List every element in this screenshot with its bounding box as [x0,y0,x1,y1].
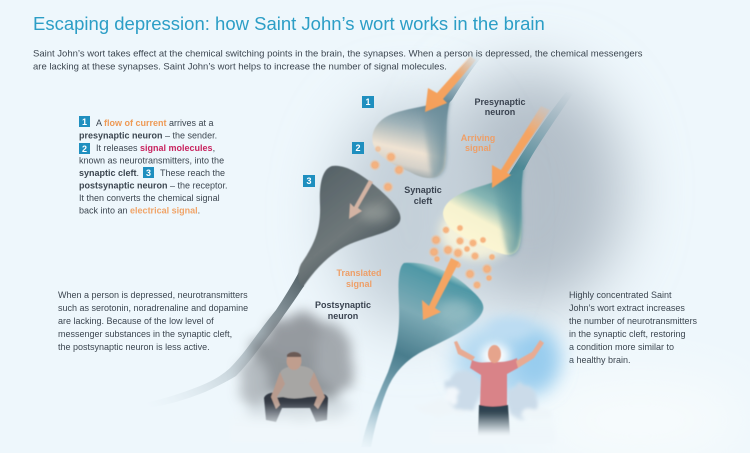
neuron: presynaptic active [440,92,574,260]
badge 1: 1 [365,97,371,107]
steps text block: 2 [82,144,87,154]
label: presynaptic neuron: neuron [485,107,515,117]
person: depressed [264,352,328,422]
depressed text: When a person is depressed, neurotransmitters [58,290,248,300]
label: synaptic cleft: Synaptic [404,185,442,195]
label: postsynaptic neuron: Postsynaptic [315,300,371,310]
steps text block: presynaptic neuron – the sender. [79,130,217,140]
arrow: arriving signal [492,106,550,188]
arrow: top neuron signal [425,56,476,112]
label: arriving signal [461,133,495,153]
sky cloud [417,318,557,420]
healthy text: a condition more similar to [569,342,674,352]
steps text block: It releases signal molecules, [96,143,215,153]
badge 1 [362,96,374,108]
neuron: postsynaptic active [361,263,483,447]
neuron: postsynaptic inactive [140,166,400,408]
steps text block: A flow of current arrives at a [96,118,214,128]
neuron: presynaptic inactive [372,50,484,178]
smoke cloud [240,315,356,426]
fog over healthy person [430,412,555,444]
steps text block: These reach the [160,168,225,178]
steps text block: It then converts the chemical signal [79,193,220,203]
label: translated signal [336,268,382,289]
steps text block: known as neurotransmitters, into the [79,156,224,166]
label: translated signal: signal [346,279,372,289]
badge 3 [303,175,315,187]
label: arriving signal: signal [465,143,491,153]
person: healthy [454,340,544,436]
label: postsynaptic neuron: neuron [328,311,358,321]
label: postsynaptic neuron [315,300,371,321]
depressed text: the postsynaptic neuron is less active. [58,342,210,352]
healthy text [569,290,698,365]
depressed text [58,290,248,352]
arrow: translated signal [422,258,459,320]
fog over depressed person [230,402,360,442]
healthy text: John’s wort extract increases [569,303,685,313]
steps text block: back into an electrical signal. [79,206,200,216]
label: presynaptic neuron [474,97,526,117]
steps text block: 1 [82,117,87,127]
intro text [33,48,643,72]
signal molecules: bottom synapse [428,224,496,290]
title: Escaping depression: how Saint John’s wort works in the brain [33,13,545,34]
steps text block: synaptic cleft. [79,168,139,178]
steps text block [79,116,228,216]
steps text block: postsynaptic neuron – the receptor. [79,180,228,190]
healthy text: Highly concentrated Saint [569,290,672,300]
badge 2 [352,142,364,154]
arrow: faint inactive [349,180,373,219]
label: synaptic cleft [404,185,442,206]
signal molecules: top synapse [369,145,405,193]
steps text block: 3 [146,168,151,178]
badge 2: 2 [355,143,361,153]
intro text: Saint John’s wort takes effect at the chemical switching points in the brain, the synapses. When a person is depressed, the chemical messengers [33,48,643,60]
badge 3: 3 [306,176,312,186]
depressed text: messenger substances in the synaptic cleft, [58,329,232,339]
label: presynaptic neuron: Presynaptic [474,97,526,107]
label: translated signal: Translated [336,268,382,278]
healthy text: the number of neurotransmitters [569,316,698,326]
healthy text: in the synaptic cleft, restoring [569,329,686,339]
label: arriving signal: Arriving [461,133,495,143]
healthy text: a healthy brain. [569,355,631,365]
label: synaptic cleft: cleft [414,196,432,206]
intro text: are lacking at these synapses. Saint John’s wort helps to increase the number of signal molecules. [33,62,447,72]
depressed text: are lacking. Because of the low level of [58,316,214,326]
depressed text: such as serotonin, noradrenaline and dopamine [58,303,248,313]
